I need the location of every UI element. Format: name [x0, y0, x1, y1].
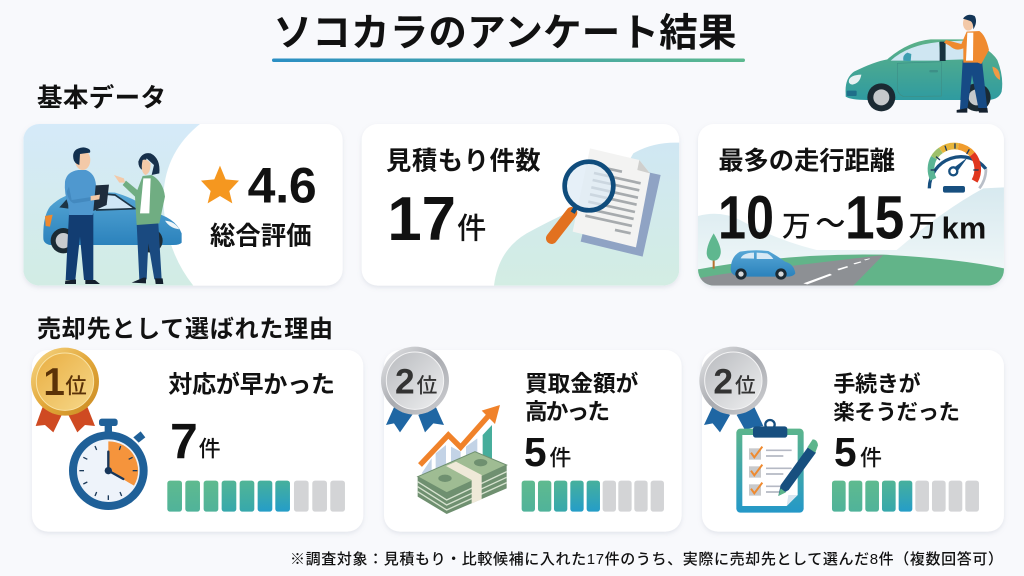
illustration: couple with blue car: [43, 147, 182, 284]
icon: green car with man: [846, 15, 1002, 113]
title: ソコカラのアンケート結果: [274, 12, 736, 55]
landscape: road: [698, 255, 883, 286]
value: 件: [199, 437, 221, 462]
panel: overall rating: [23, 124, 343, 286]
badge: silver medal rank 2: 2: [395, 362, 415, 401]
value: 万: [782, 211, 811, 243]
landscape: hills: [698, 188, 1004, 270]
value: 7: [170, 413, 198, 469]
value: 5: [524, 429, 547, 475]
badge: silver medal rank 2: [381, 347, 449, 432]
value: [718, 183, 986, 252]
bar: 5 of 9: [522, 481, 664, 512]
icon: tree: [707, 233, 721, 269]
badge: silver medal rank 2: 2: [713, 362, 733, 401]
icon: clipboard with pen: [736, 420, 818, 513]
value: 件: [860, 445, 882, 470]
icon: stopwatch: [73, 419, 145, 506]
icon: star: [201, 166, 239, 203]
label: 対応が早かった: [168, 370, 335, 398]
label: 見積もり件数: [386, 147, 541, 175]
value: [834, 429, 882, 475]
badge: silver medal rank 2: 位: [417, 375, 438, 398]
value: 10: [718, 183, 774, 252]
icon: money stack with rising chart: [418, 405, 507, 514]
value: [387, 185, 486, 254]
icon: document with magnifier: [552, 148, 661, 257]
panel: rank 2 high price: [381, 347, 682, 532]
panel: most common mileage: [698, 124, 1004, 286]
label: [833, 372, 960, 425]
label: 買取金額が: [525, 371, 639, 397]
value: ～: [815, 208, 845, 241]
footnote: ※調査対象：見積もり・比較候補に入れた17件のうち、実際に売却先として選んだ8件（複数回答可）: [290, 550, 1003, 568]
sky background: [23, 124, 200, 286]
landscape: ground: [698, 254, 1004, 286]
title underline: [272, 58, 745, 62]
badge: gold medal rank 1: 位: [65, 374, 87, 398]
icon: speedometer: [929, 143, 986, 193]
value: 15: [845, 183, 904, 252]
heading: basic data: 基本データ: [37, 84, 166, 112]
label: 最多の走行距離: [718, 147, 895, 175]
badge: gold medal rank 1: 1: [43, 361, 65, 404]
icon: blue car: [731, 250, 795, 280]
rating label: 総合評価: [210, 222, 312, 250]
value: 17: [387, 185, 456, 254]
panel: rank 2 easy paperwork: [699, 347, 1004, 532]
value: [170, 413, 221, 469]
rating value: 4.6: [248, 158, 317, 214]
label: [525, 371, 639, 425]
panel: rank 1 fast response: [31, 348, 363, 532]
value: 万: [909, 211, 937, 243]
bar: 5 of 9: [832, 481, 979, 512]
value: km: [942, 212, 986, 246]
badge: silver medal rank 2: 位: [735, 375, 756, 398]
bar: 7 of 10: [167, 481, 345, 512]
label: 楽そうだった: [833, 401, 960, 425]
badge: gold medal rank 1: [31, 348, 99, 432]
badge: silver medal rank 2: [699, 347, 767, 432]
value: 件: [457, 213, 486, 246]
panel: number of estimates: [362, 124, 679, 286]
heading: reasons chosen: 売却先として選ばれた理由: [37, 316, 333, 343]
label: 手続きが: [833, 372, 921, 397]
value: [524, 429, 571, 475]
value: 件: [549, 445, 571, 470]
value: 5: [834, 429, 857, 475]
background blob: [494, 143, 679, 286]
label: 高かった: [525, 399, 610, 425]
